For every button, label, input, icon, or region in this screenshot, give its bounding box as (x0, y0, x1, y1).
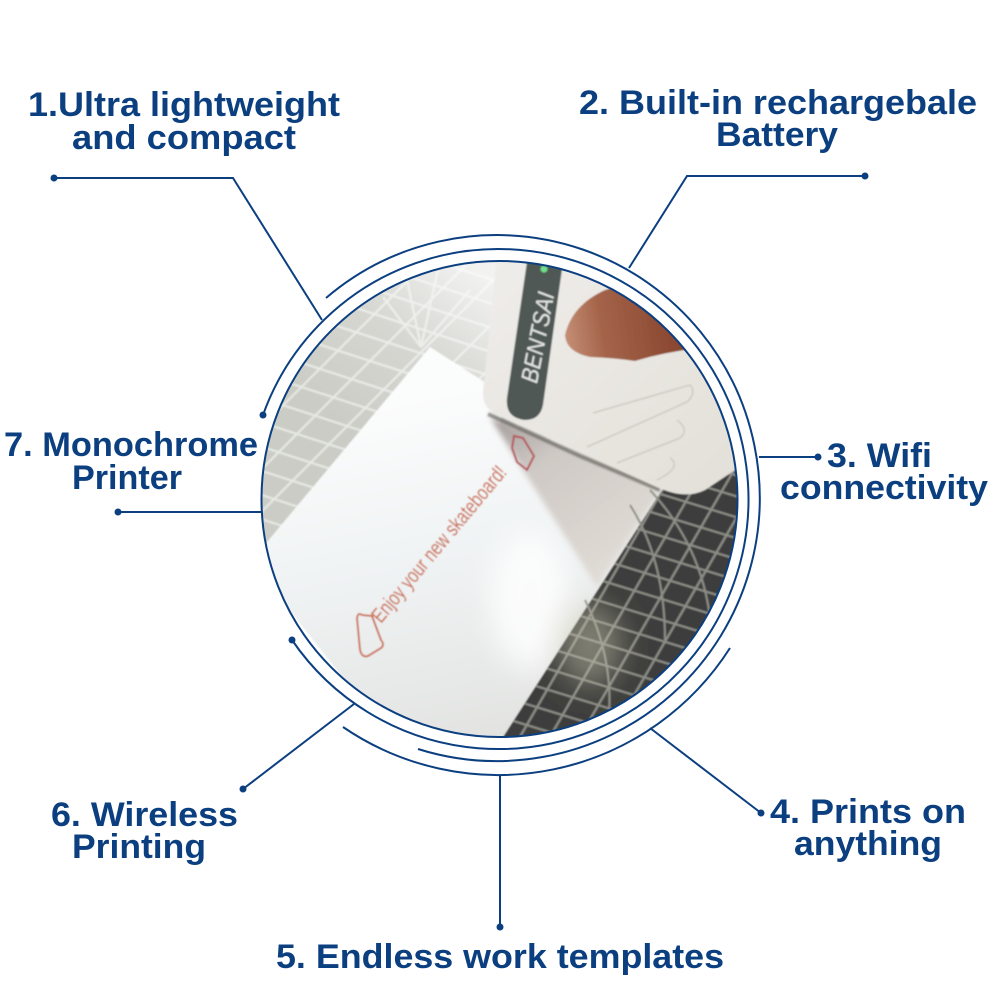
printed logo on fold (512, 436, 534, 470)
ring 3 (326, 235, 760, 761)
printed text on paper: Enjoy your new skateboard! (367, 462, 511, 627)
paper sheet (266, 347, 636, 736)
paper highlight (492, 541, 568, 668)
printer edge shadow (488, 414, 660, 490)
callout 4: anything (794, 825, 942, 863)
callout 5 (276, 775, 724, 976)
callout 6 (51, 704, 354, 866)
callout 3: 3. Wifi (827, 437, 932, 475)
printer label strip (507, 255, 564, 420)
callout 2: Battery (716, 116, 838, 154)
callout 4 (650, 728, 966, 863)
printed logo on paper (357, 614, 383, 656)
shadowed paper fold (490, 417, 662, 587)
callout 3 (759, 437, 988, 507)
callout 7 (4, 426, 261, 516)
callout 1: and compact (72, 119, 297, 157)
callout 4: 4. Prints on (770, 793, 966, 831)
light cutting mat (262, 262, 550, 543)
photo: printer on cutting mat (262, 262, 736, 736)
printer grooves (587, 385, 693, 480)
callout 1 (28, 86, 341, 320)
printer body (483, 255, 750, 494)
callout 3: connectivity (780, 469, 988, 507)
dark cutting mat (502, 470, 736, 736)
ring 2 (263, 249, 748, 749)
callout 7: 7. Monochrome (4, 426, 258, 464)
callout 2 (579, 84, 977, 268)
green LED (540, 266, 548, 272)
rings around photo (260, 235, 760, 775)
callout 6: Printing (72, 828, 206, 866)
callout 2: 2. Built-in rechargebale (579, 84, 977, 122)
callout 5: 5. Endless work templates (276, 938, 724, 976)
callout 7: Printer (72, 459, 182, 497)
callout 1: 1.Ultra lightweight (28, 86, 341, 124)
callout 6: 6. Wireless (51, 796, 238, 834)
ring 4 (343, 648, 730, 775)
brand name: BENTSAI (516, 289, 560, 385)
thumb (564, 288, 684, 362)
